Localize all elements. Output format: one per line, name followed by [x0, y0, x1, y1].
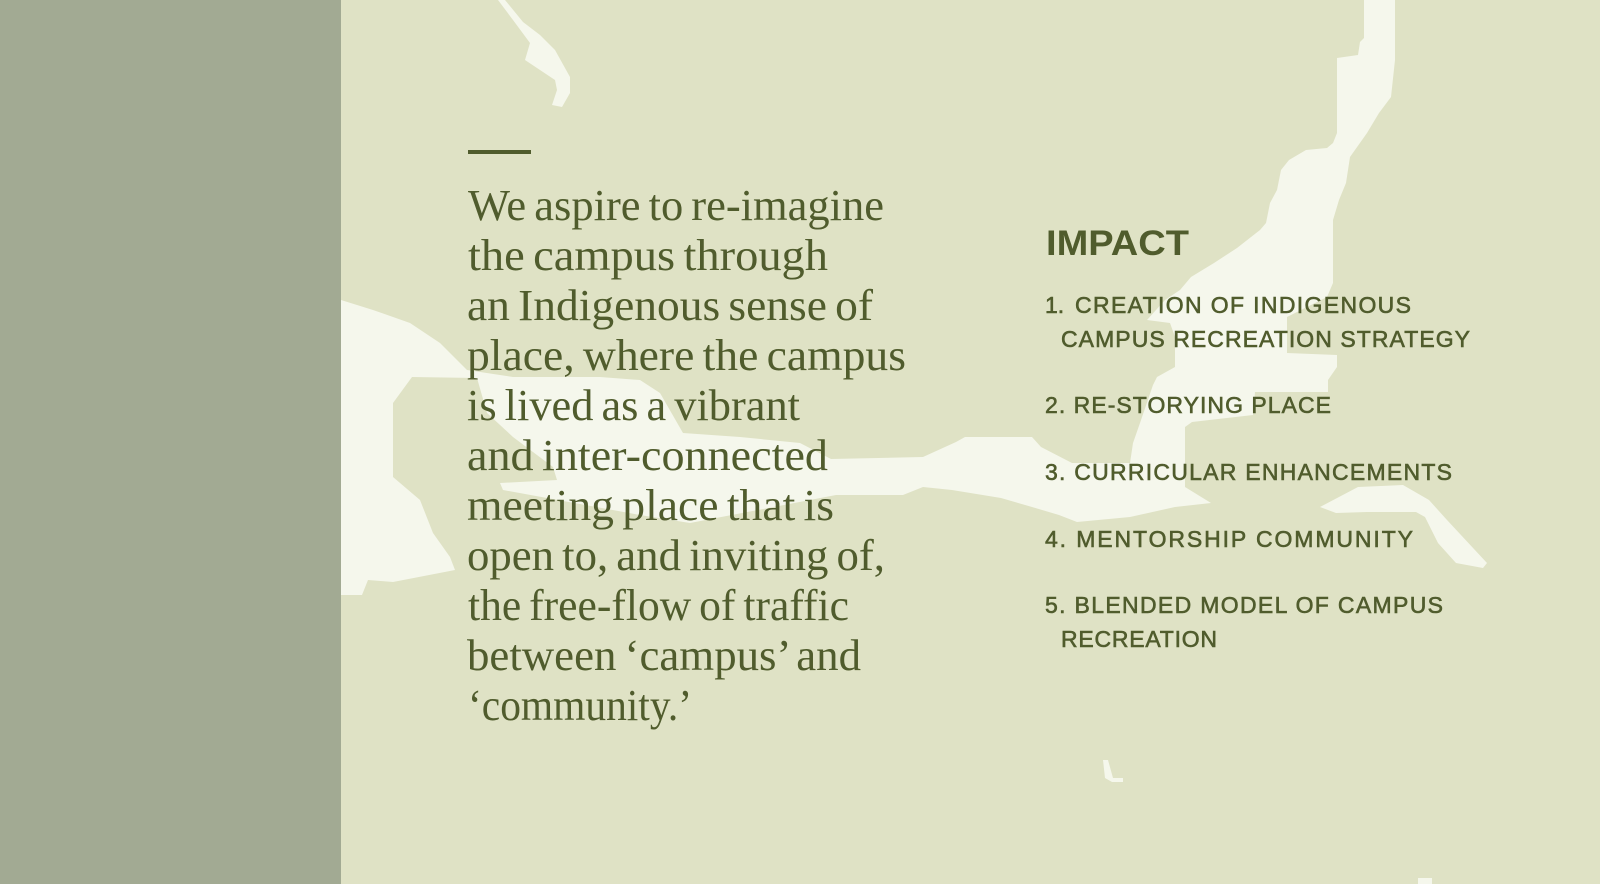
text block: vision statement: the free-flow of traffic: [468, 581, 849, 630]
list item 5: RECREATION: [1061, 626, 1217, 652]
river: main channel: [341, 0, 1395, 595]
river: small pond: [1103, 760, 1123, 782]
text block: vision statement: meeting place that is: [467, 481, 834, 530]
text block: vision statement: between ‘campus’ and: [467, 631, 861, 680]
text block: vision statement: the campus through: [468, 231, 828, 280]
river: northwest stream: [498, 0, 570, 107]
accent rule: [468, 150, 531, 154]
text block: vision statement: We aspire to re-imagine: [468, 181, 884, 230]
text block: vision statement: and inter-connected: [467, 431, 828, 480]
list item 1: 1.: [1045, 292, 1064, 318]
list item 1: CAMPUS RECREATION STRATEGY: [1061, 326, 1470, 352]
text block: vision statement: place, where the campus: [467, 331, 906, 380]
list item 4: 4. MENTORSHIP COMMUNITY: [1045, 526, 1413, 552]
list item 5: 5. BLENDED MODEL OF CAMPUS: [1045, 592, 1443, 618]
text block: vision statement: is lived as a vibrant: [467, 381, 800, 430]
river: southern fragment: [1418, 878, 1432, 884]
map: river network: [341, 0, 1487, 884]
list: impact items: [1045, 292, 1470, 652]
text block: vision statement: open to, and inviting of,: [467, 531, 885, 580]
list item 5: [1045, 592, 1443, 652]
text block: vision statement: an Indigenous sense of: [467, 281, 873, 330]
list item 1: CREATION OF INDIGENOUS: [1075, 292, 1411, 318]
panel: map background: [341, 0, 1600, 884]
list item 1: [1045, 292, 1470, 352]
text block: vision statement: [467, 181, 906, 730]
list item 2: 2. RE-STORYING PLACE: [1045, 392, 1331, 418]
panel: left sidebar: [0, 0, 341, 884]
heading: impact: IMPACT: [1046, 224, 1189, 263]
text block: vision statement: ‘community.’: [468, 681, 692, 730]
river: eastern branch: [1320, 485, 1487, 568]
list item 3: 3. CURRICULAR ENHANCEMENTS: [1045, 459, 1452, 485]
